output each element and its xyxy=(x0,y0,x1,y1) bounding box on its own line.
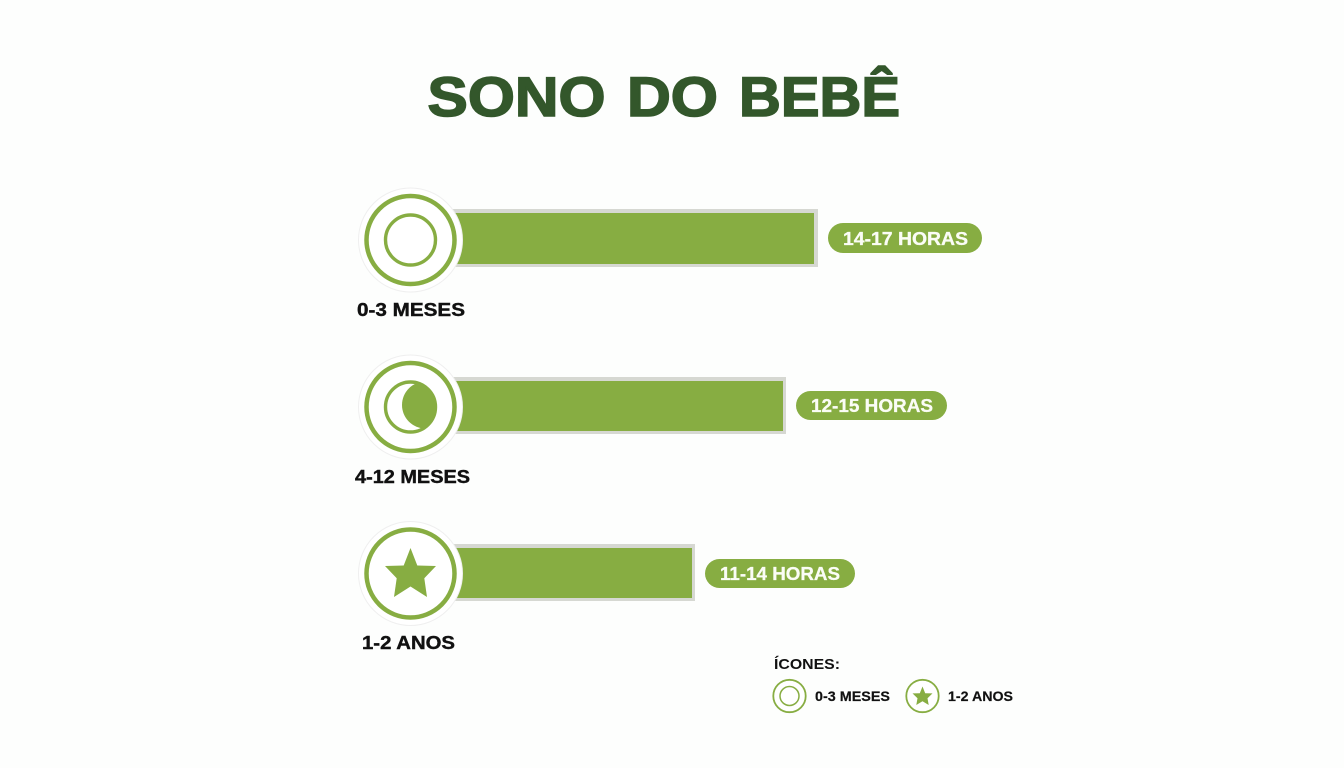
pill: 14-17 horas xyxy=(828,223,982,253)
pill: 12-15 horas: 12-15 HORAS xyxy=(811,396,933,416)
row: 1-2 anos xyxy=(358,522,855,653)
bar: 11-14 horas xyxy=(440,544,695,601)
pill: 12-15 horas xyxy=(796,391,947,420)
bar: 12-15 horas xyxy=(440,377,786,434)
title: BEBÊ xyxy=(739,65,900,128)
row: 4-12 meses xyxy=(355,355,947,487)
label: 0-3 meses: 0-3 MESES xyxy=(357,300,465,320)
title: SONO xyxy=(428,65,606,128)
label: 1-2 anos: 1-2 ANOS xyxy=(362,633,455,653)
bar: 14-17 horas xyxy=(440,209,818,267)
icon: concentric circles xyxy=(358,188,462,292)
title: DO xyxy=(627,65,718,128)
title xyxy=(428,65,900,128)
pill: 14-17 horas: 14-17 HORAS xyxy=(843,229,968,249)
legend icon: star xyxy=(906,680,939,712)
pill: 11-14 horas xyxy=(705,559,855,588)
icon: star xyxy=(358,522,462,626)
legend label: 1-2 anos: 1-2 ANOS xyxy=(948,688,1013,704)
legend label: 0-3 meses: 0-3 MESES xyxy=(815,688,890,704)
legend heading: ÍCONES: xyxy=(774,656,840,673)
pill: 11-14 horas: 11-14 HORAS xyxy=(720,564,840,584)
label: 4-12 meses: 4-12 MESES xyxy=(355,467,470,487)
legend xyxy=(773,656,1013,712)
icon: crescent moon xyxy=(358,355,462,459)
row: 0-3 meses xyxy=(357,188,982,320)
legend icon: concentric circles xyxy=(773,680,806,712)
